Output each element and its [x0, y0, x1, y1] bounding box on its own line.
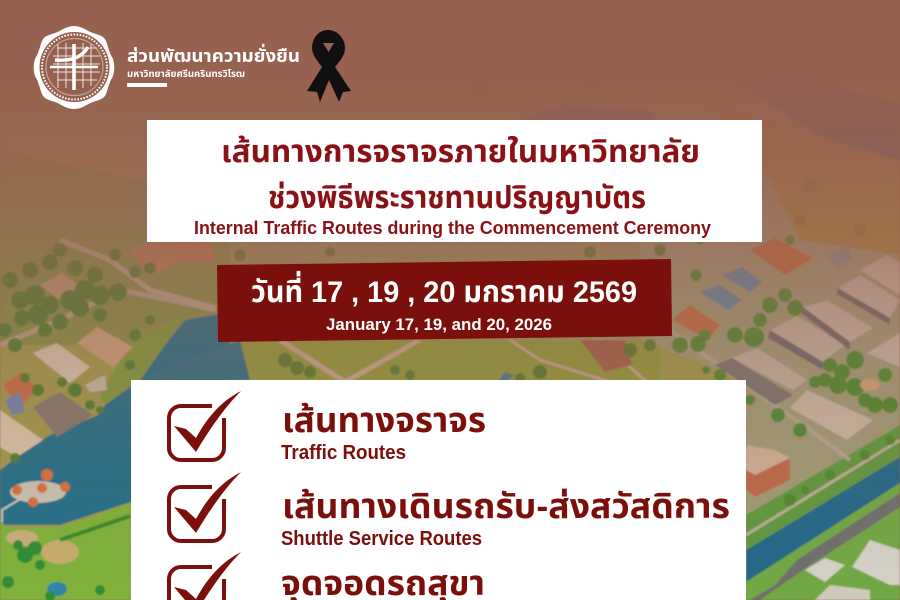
panel: checklist	[131, 380, 746, 600]
subtitle: English: Internal Traffic Routes during the Commencement Ceremony	[194, 217, 712, 238]
panel: title card	[147, 120, 762, 242]
item: shuttle routes	[169, 472, 730, 550]
left buildings	[77, 327, 133, 367]
label: Thai: เส้นทางจราจร	[282, 401, 486, 440]
panel: date banner	[217, 259, 672, 342]
date: Thai: วันที่ 17 , 19 , 20 มกราคม 2569	[251, 270, 637, 309]
label: English: Shuttle Service Routes	[281, 528, 482, 550]
label: Thai: เส้นทางเดินรถรับ-ส่งสวัสดิการ	[282, 487, 730, 526]
lakes	[739, 72, 900, 160]
date: English: January 17, 19, and 20, 2026	[326, 315, 552, 334]
logo: university seal	[34, 26, 114, 109]
logo text: unit name	[127, 44, 300, 87]
item: traffic routes	[169, 391, 486, 464]
right trees	[672, 235, 898, 506]
centre trees	[234, 244, 666, 383]
logo text: unit name: มหาวิทยาลัยศรีนครินทรวิโรฒ	[127, 69, 245, 80]
island	[10, 481, 66, 503]
faded upper campus	[470, 35, 866, 236]
icon: checkbox tick	[169, 391, 241, 460]
heading: Thai title line 2: ช่วงพิธีพระราชทานปริญญาบัตร	[268, 180, 646, 215]
left shore lawn	[100, 312, 185, 405]
heading: Thai title line 1: เส้นทางการจราจรภายในมหาวิทยาลัย	[221, 134, 700, 169]
left trees	[0, 243, 156, 463]
logo text: unit name: ส่วนพัฒนาความยั่งยืน	[127, 44, 300, 66]
right buildings	[750, 238, 813, 275]
roads	[0, 290, 216, 345]
icon: checkbox tick	[169, 472, 241, 541]
icon: checkbox tick	[169, 552, 241, 600]
item: restroom parking	[169, 552, 485, 600]
icon: black mourning ribbon	[307, 30, 351, 102]
label: English: Traffic Routes	[281, 442, 406, 464]
